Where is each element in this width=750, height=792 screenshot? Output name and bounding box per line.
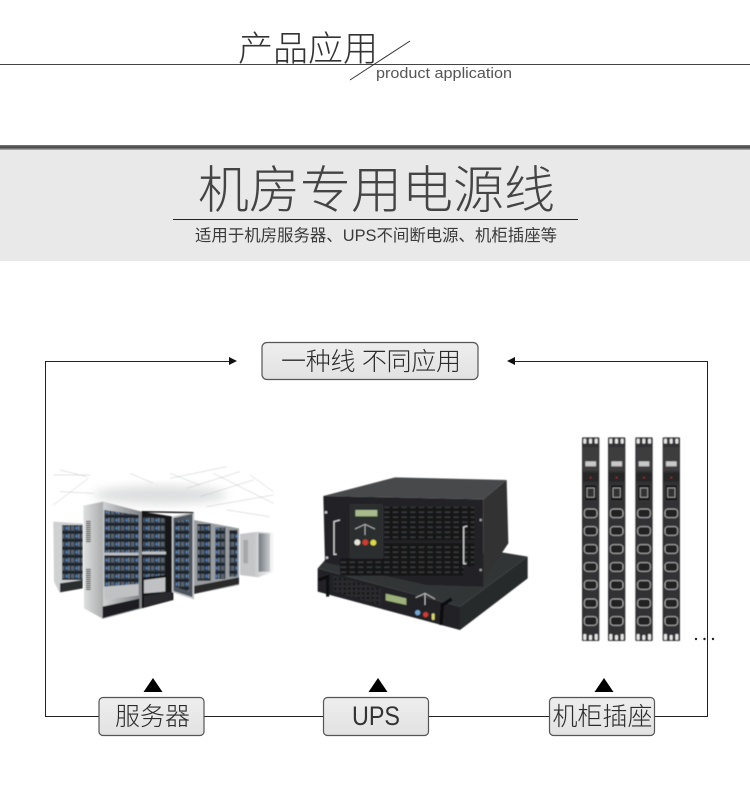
flow connector lines [46, 362, 708, 716]
section heading: product application: 产品应用 [238, 30, 378, 69]
arrow: right into heading box [507, 357, 515, 365]
button: one cable, different applications [262, 342, 478, 380]
banner: data centre power cords: 适用于机房服务器、UPS不间断电源、机柜插座等 [195, 227, 557, 245]
rear left cabinet [53, 522, 83, 592]
arrow: server up [144, 678, 162, 692]
ellipsis: more products [695, 638, 714, 640]
arrow: PDU up [594, 678, 614, 692]
arrow: UPS up [368, 678, 388, 692]
open glass door [173, 513, 193, 598]
main cabinet side [83, 502, 103, 619]
section heading: product application [0, 30, 750, 82]
button: server [99, 698, 204, 736]
banner: data centre power cords: 机房专用电源线 [198, 162, 555, 219]
image: rack PDU strips [582, 437, 680, 641]
open cabinet [142, 512, 173, 608]
button: one cable, different applications: 一种线 不同应用 [281, 348, 461, 376]
image: UPS units [318, 477, 528, 630]
main cabinet front [103, 502, 142, 619]
image: server room [53, 467, 277, 619]
section heading: product application: product application [376, 65, 512, 82]
arrow: left into heading box [229, 357, 237, 365]
button: server: 服务器 [115, 703, 190, 731]
button: cabinet socket: 机柜插座 [552, 703, 653, 731]
middle cabinets [194, 520, 239, 594]
banner: data centre power cords [0, 145, 750, 261]
button: UPS: UPS [352, 701, 400, 731]
button: UPS [324, 698, 428, 736]
rear right cabinet [240, 532, 273, 577]
